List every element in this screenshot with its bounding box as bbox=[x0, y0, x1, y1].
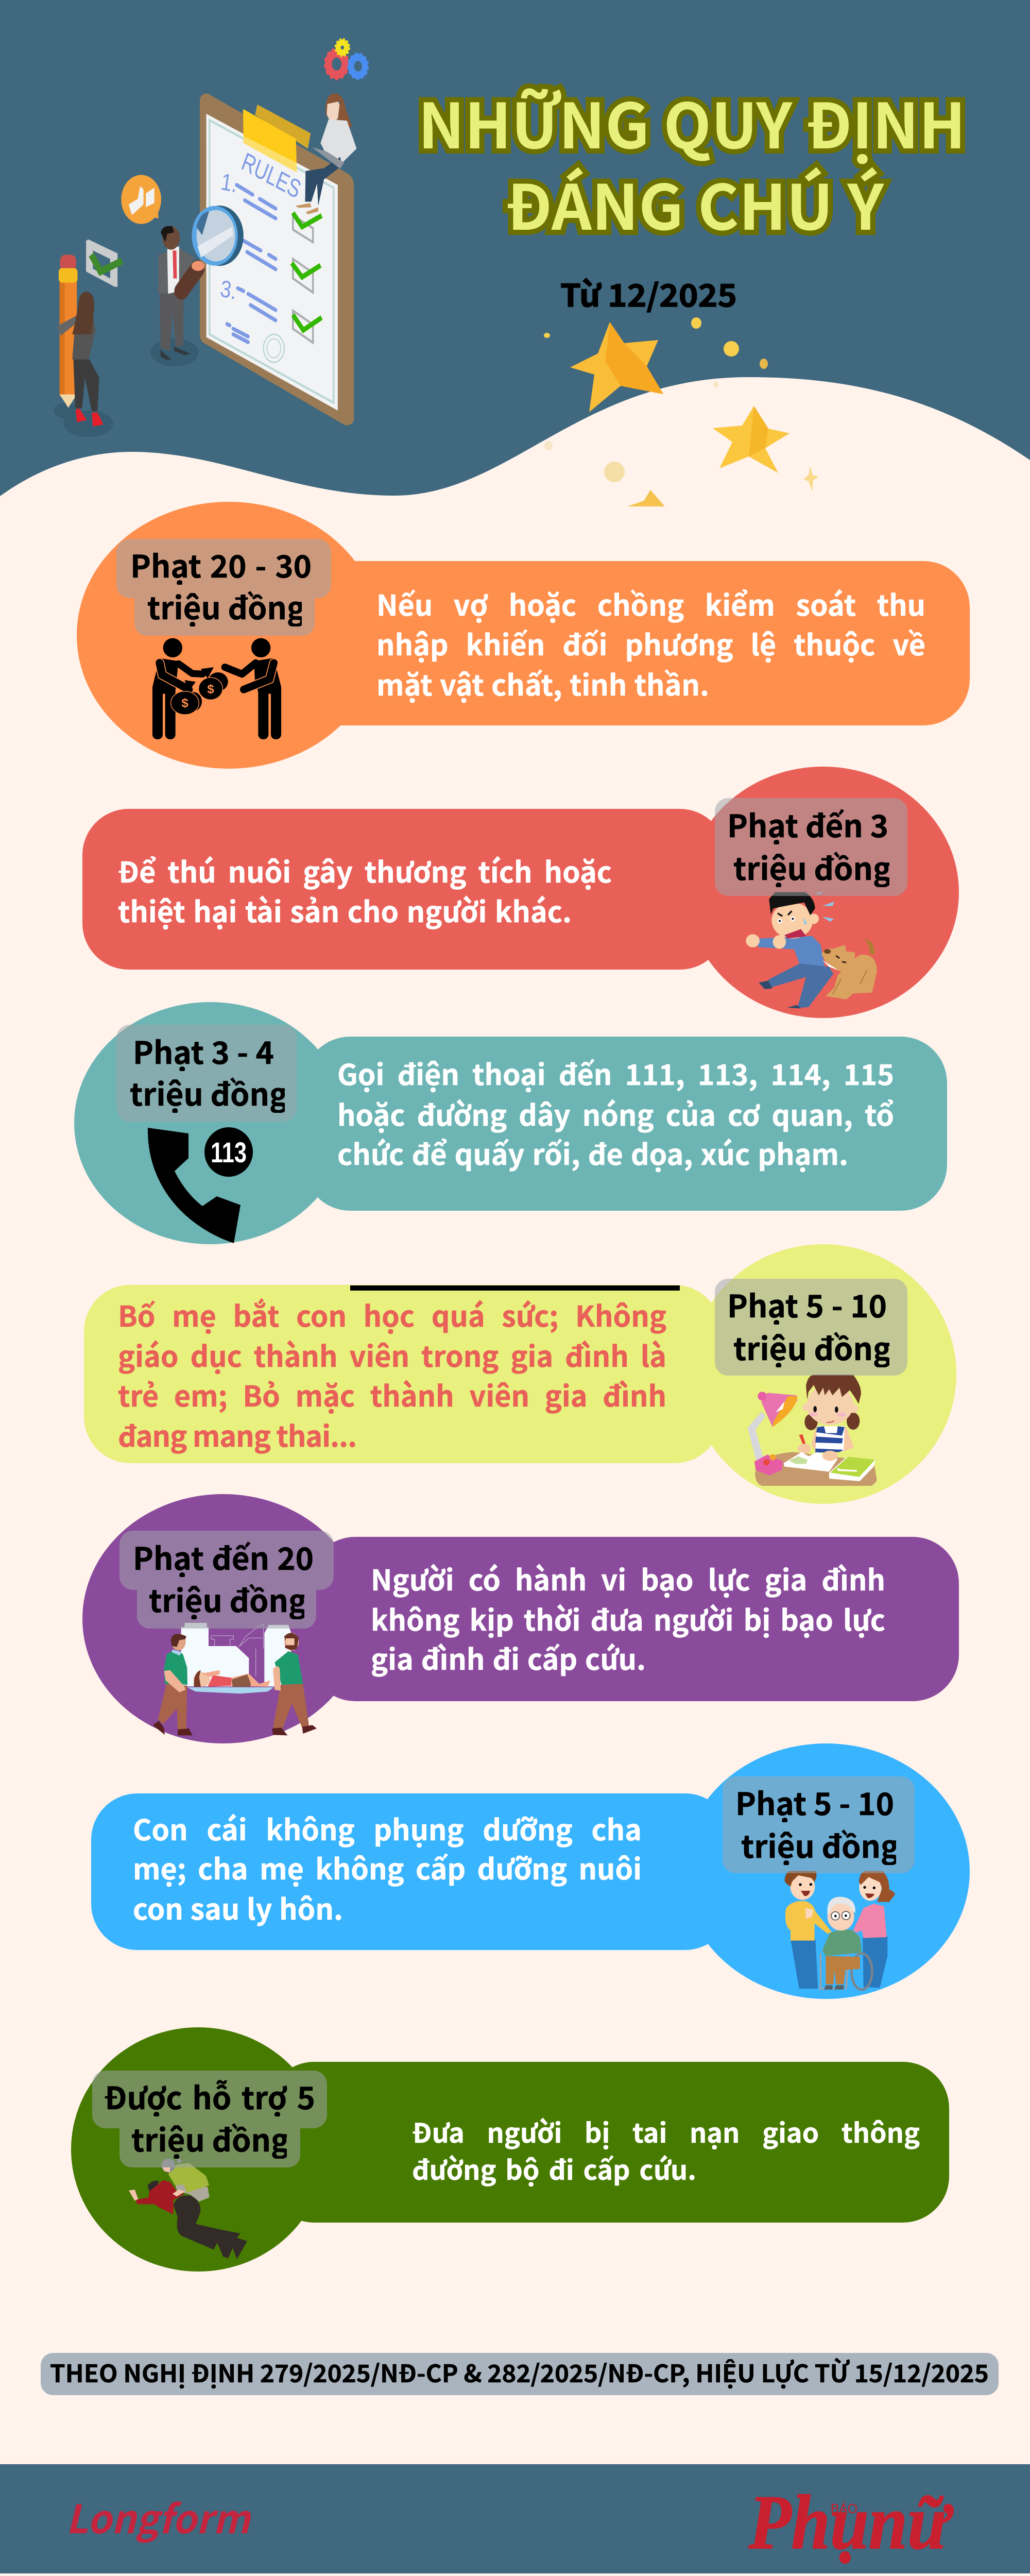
subtitle: Từ 12/2025 bbox=[560, 271, 737, 316]
panel: row 5 Phạt đến 20 triệu đồng bbox=[82, 1494, 959, 1743]
icon: money exchange bbox=[152, 638, 281, 739]
description text: gia đình đi cấp cứu. bbox=[371, 1637, 646, 1677]
icon: money exchange: $ bbox=[181, 697, 188, 710]
panel: row 4 Phạt 5 - 10 triệu đồng bbox=[84, 1244, 956, 1504]
check frame bbox=[86, 240, 117, 287]
label text bbox=[727, 803, 889, 887]
sitting woman bbox=[327, 98, 340, 121]
panel: row 6 Phạt 5 - 10 triệu đồng bbox=[91, 1743, 970, 1999]
footer bbox=[0, 2464, 1030, 2573]
description text bbox=[118, 1293, 666, 1454]
description text: Gọi điện thoại đến 111, 113, 114, 115 bbox=[337, 1052, 894, 1093]
label box bbox=[119, 1531, 334, 1629]
panel: row 2 Phạt đến 3 triệu đồng bbox=[82, 767, 959, 1018]
description text bbox=[371, 1557, 885, 1677]
description text: Bố mẹ bắt con học quá sức; Không bbox=[118, 1294, 666, 1334]
label text bbox=[130, 544, 312, 626]
icon: phone 113 bbox=[148, 1127, 253, 1243]
description text: giáo dục thành viên trong gia đình là bbox=[118, 1334, 666, 1375]
label box bbox=[92, 2071, 327, 2167]
description text: Con cái không phụng dưỡng cha bbox=[133, 1807, 642, 1848]
logo: Báo Phụ nữ: BÁO bbox=[831, 2501, 857, 2516]
description text: đang mang thai... bbox=[118, 1414, 356, 1454]
panel: row 3 Phạt 3 - 4 triệu đồng bbox=[74, 1002, 947, 1244]
icon: stretcher carrying victim bbox=[153, 1623, 317, 1735]
label text bbox=[104, 2075, 315, 2159]
logo: Báo Phụ nữ: Phụnữ bbox=[748, 2480, 953, 2565]
icon: girl studying bbox=[748, 1375, 877, 1486]
description text: hoặc đường dây nóng của cơ quan, tổ bbox=[337, 1093, 894, 1133]
label text bbox=[133, 1536, 314, 1619]
description text bbox=[376, 582, 925, 703]
panel: row 1 Phạt 20 - 30 triệu đồng bbox=[77, 502, 970, 769]
woman with pencil bbox=[57, 316, 78, 336]
label box bbox=[715, 1279, 907, 1376]
man with magnifier bbox=[160, 291, 184, 351]
label text bbox=[727, 1283, 889, 1367]
description text: Người có hành vi bạo lực gia đình bbox=[371, 1557, 885, 1598]
label box bbox=[116, 539, 331, 636]
description text bbox=[337, 1052, 894, 1173]
description text: Nếu vợ hoặc chồng kiểm soát thu bbox=[376, 583, 925, 623]
description text: chức để quấy rối, đe dọa, xúc phạm. bbox=[337, 1132, 848, 1173]
description text: mẹ; cha mẹ không cấp dưỡng nuôi bbox=[133, 1846, 642, 1887]
illustration: rules clipboard with people: 1. bbox=[219, 168, 239, 197]
description text bbox=[412, 2110, 920, 2189]
label box bbox=[715, 798, 907, 896]
description text: thiệt hại tài sản cho người khác. bbox=[118, 889, 572, 930]
gears bbox=[329, 54, 345, 75]
icon: dog biting man bbox=[746, 892, 877, 1008]
description text: Đưa người bị tai nạn giao thông bbox=[412, 2112, 920, 2150]
title: ĐÁNG CHÚ Ý bbox=[506, 158, 885, 248]
description text: con sau ly hôn. bbox=[133, 1887, 343, 1927]
icon: helping accident victim bbox=[129, 2156, 247, 2259]
illustration: rules clipboard with people: 3. bbox=[219, 275, 238, 304]
description text: trẻ em; Bỏ mặc thành viên gia đình bbox=[118, 1374, 666, 1414]
description text: đường bộ đi cấp cứu. bbox=[412, 2149, 696, 2188]
illustration: rules clipboard with people: 2 bbox=[219, 221, 233, 249]
decorative stars and dots bbox=[544, 317, 819, 506]
header background with wave bbox=[0, 0, 1030, 516]
illustration: rules clipboard with people: RULES bbox=[238, 147, 304, 204]
label box bbox=[723, 1776, 915, 1873]
icon: money exchange: $ bbox=[207, 682, 214, 696]
description text bbox=[118, 849, 612, 930]
illustration: rules clipboard with people bbox=[54, 39, 368, 437]
description text: nhập khiến đối phương lệ thuộc về bbox=[376, 622, 925, 663]
description text: Để thú nuôi gây thương tích hoặc bbox=[118, 850, 612, 890]
description text: mặt vật chất, tinh thần. bbox=[376, 663, 709, 703]
clipboard board bbox=[200, 94, 354, 426]
title: NHỮNG QUY ĐỊNH bbox=[418, 76, 966, 166]
footer label: Longform: Longform bbox=[66, 2488, 252, 2545]
label box bbox=[116, 1025, 297, 1122]
label text bbox=[735, 1781, 896, 1865]
title bbox=[418, 76, 966, 248]
description text bbox=[133, 1807, 642, 1927]
panel: row 7 Được hỗ trợ 5 triệu đồng bbox=[71, 2027, 949, 2272]
thumbs up bubble bbox=[121, 175, 161, 224]
description text: không kịp thời đưa người bị bạo lực bbox=[371, 1598, 885, 1638]
label text bbox=[130, 1030, 285, 1113]
source note: THEO NGHỊ ĐỊNH 279/2025/NĐ-CP & 282/2025/NĐ-CP, HIỆU LỰC TỪ 15/12/2025 bbox=[50, 2354, 989, 2389]
pencil bbox=[60, 272, 77, 396]
icon: phone 113: 113 bbox=[211, 1136, 247, 1168]
icon: family with elderly in wheelchair bbox=[784, 1871, 895, 1990]
